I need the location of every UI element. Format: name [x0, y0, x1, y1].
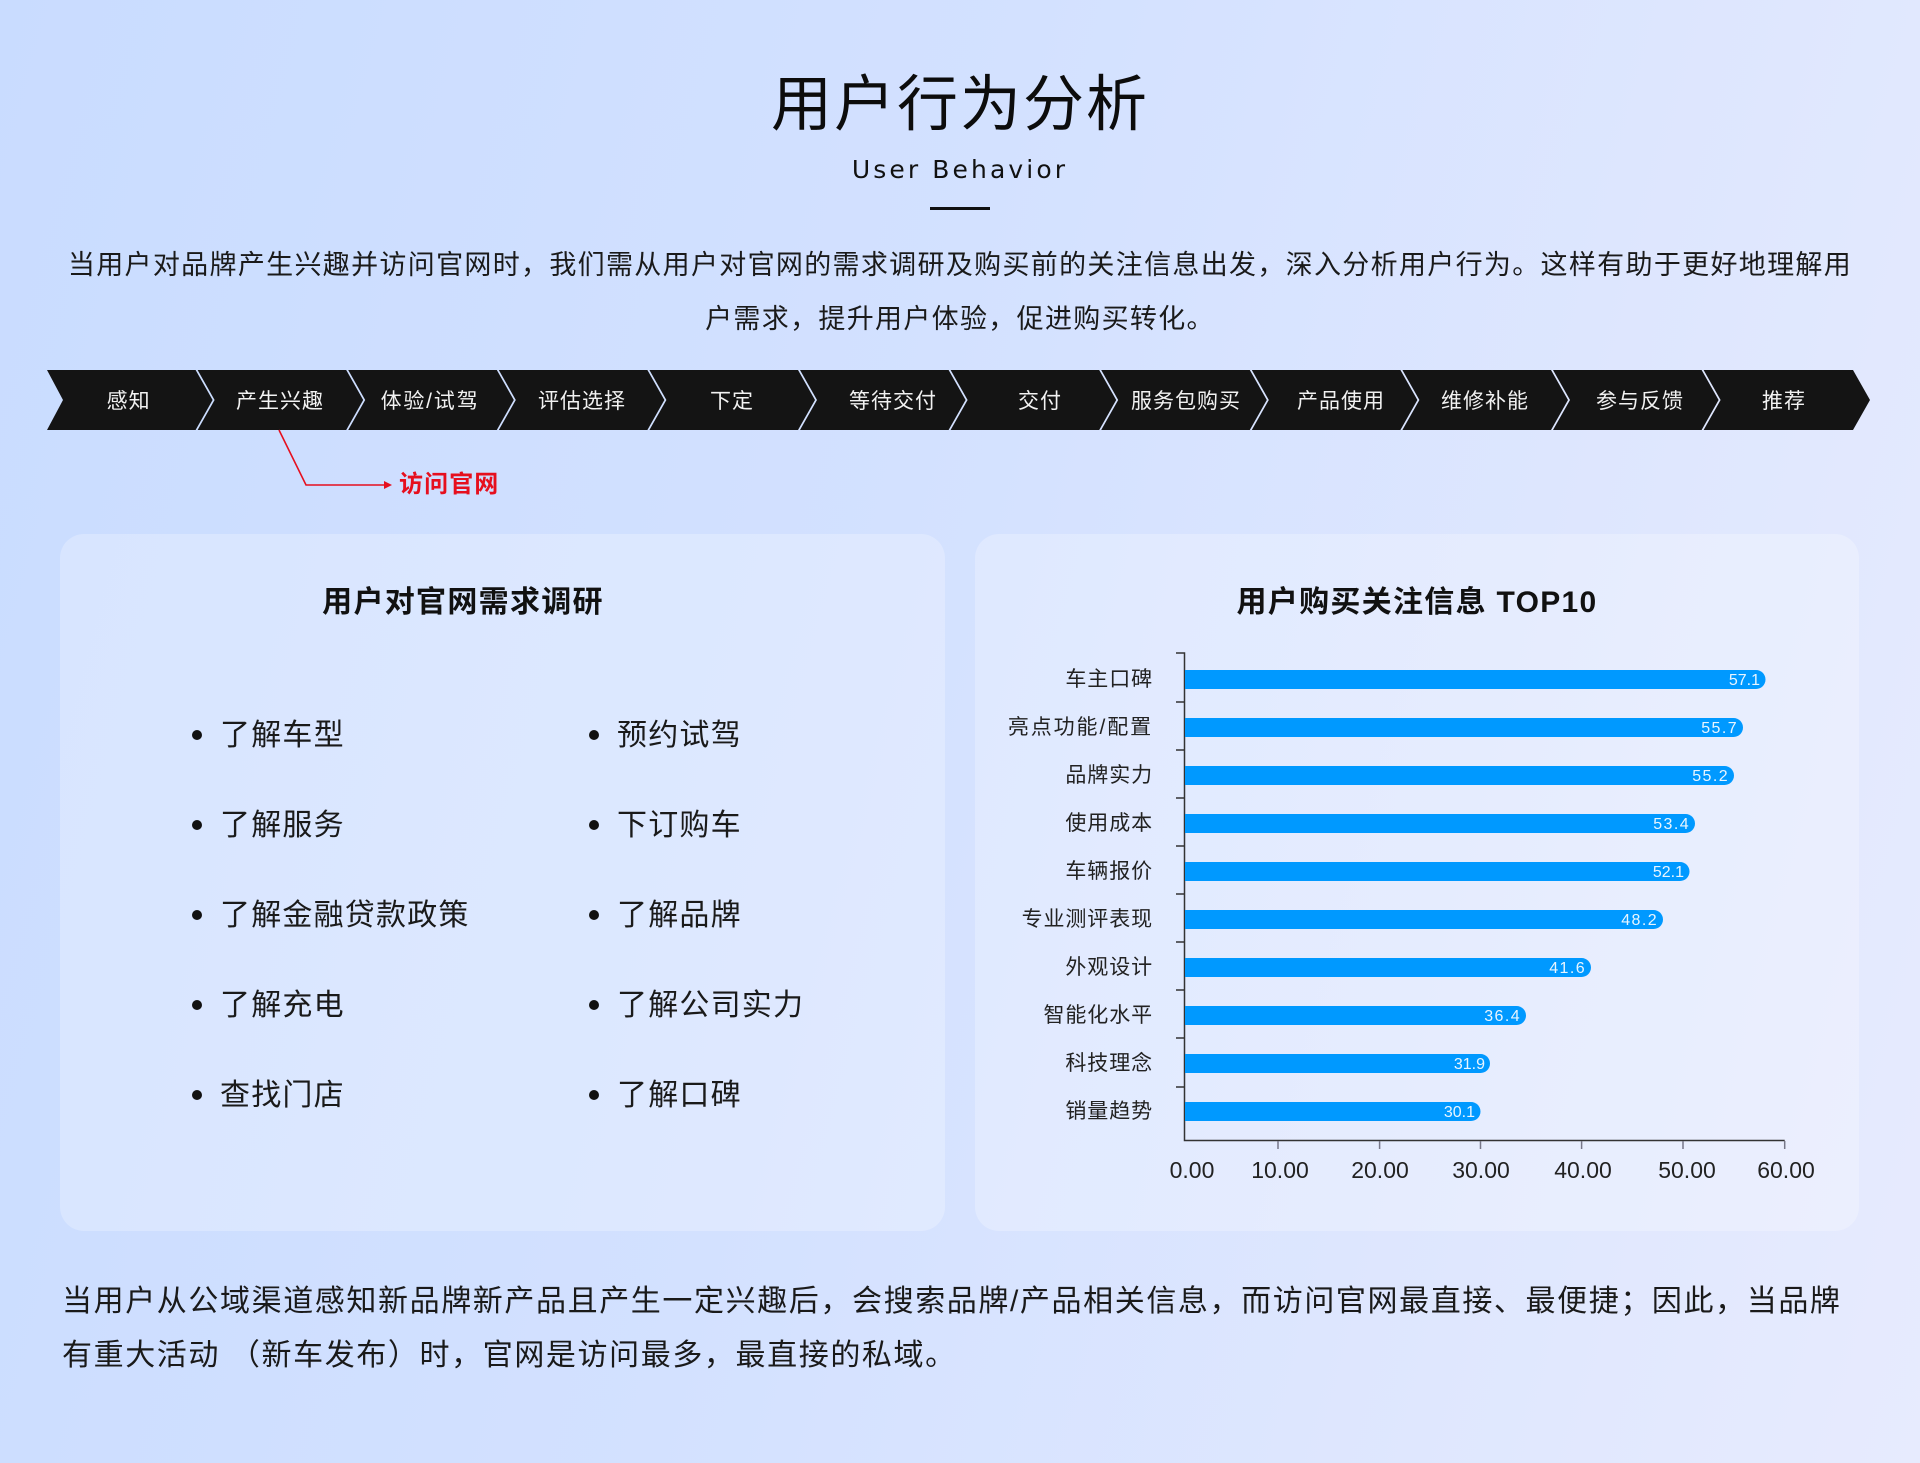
bar: 智能化水平 36.4 [1044, 1004, 1526, 1027]
panel heading: 用户对官网需求调研 [322, 586, 604, 619]
conclusion text: 当用户从公域渠道感知新品牌新产品且产生一定兴趣后，会搜索品牌/产品相关信息，而访问官网最直接、最便捷；因此，当品牌 [62, 1285, 1842, 1318]
x axis labels: 60.00 [1757, 1157, 1815, 1183]
x axis labels: 40.00 [1554, 1157, 1612, 1183]
panel: purchase concerns top 10 [975, 534, 1859, 1231]
callout: 访问官网: 访问官网 [399, 471, 499, 498]
bar: 科技理念 31.9: 31.9 [1454, 1056, 1485, 1073]
conclusion text: 有重大活动 （新车发布）时，官网是访问最多，最直接的私域。 [62, 1339, 957, 1372]
process chevron row [47, 370, 1870, 498]
bar: 车辆报价 52.1: 车辆报价 [1065, 860, 1153, 883]
chevron: 感知 [47, 370, 213, 430]
x axis labels: 0.00 [1170, 1157, 1214, 1183]
list item: 了解公司实力 [617, 989, 804, 1022]
bar: 车主口碑 57.1: 车主口碑 [1065, 668, 1153, 691]
bar: 专业测评表现 48.2 [1022, 908, 1663, 931]
bar: 专业测评表现 48.2: 48.2 [1621, 912, 1658, 929]
bar: 亮点功能/配置 55.7: 55.7 [1701, 720, 1738, 737]
chevron: 交付 [951, 370, 1116, 430]
bar chart [1008, 652, 1815, 1183]
bar: 品牌实力 55.2 [1065, 764, 1734, 787]
intro text [68, 250, 1852, 334]
chevron: 等待交付 [800, 370, 966, 430]
intro text: 户需求，提升用户体验，促进购买转化。 [705, 304, 1215, 334]
bar: 智能化水平 36.4: 36.4 [1484, 1008, 1521, 1025]
title: 用户行为分析 [771, 70, 1149, 138]
x axis labels: 50.00 [1658, 1157, 1716, 1183]
chevron: 等待交付: 等待交付 [849, 390, 937, 413]
chevron: 维修补能 [1402, 370, 1568, 430]
title underline [930, 207, 990, 210]
bar: 专业测评表现 48.2: 专业测评表现 [1022, 908, 1153, 931]
chevron: 产生兴趣: 产生兴趣 [236, 390, 324, 413]
chevron: 产品使用: 产品使用 [1297, 390, 1385, 413]
chevron: 感知: 感知 [107, 390, 151, 413]
chevron: 评估选择: 评估选择 [538, 390, 626, 413]
chevron: 服务包购买 [1101, 370, 1267, 430]
chevron: 参与反馈: 参与反馈 [1596, 390, 1684, 413]
chevron: 交付: 交付 [1018, 390, 1062, 413]
list item: 了解品牌 [617, 899, 742, 932]
x axis labels: 10.00 [1251, 1157, 1309, 1183]
list item: 了解车型 [220, 719, 345, 752]
bar: 销量趋势 30.1 [1065, 1100, 1480, 1123]
x axis labels: 30.00 [1452, 1157, 1510, 1183]
chevron: 参与反馈 [1553, 370, 1719, 430]
bar: 车主口碑 57.1: 57.1 [1729, 672, 1760, 689]
list item: 预约试驾 [617, 719, 742, 752]
chevron: 下定 [649, 370, 815, 430]
bar: 车辆报价 52.1: 52.1 [1653, 864, 1684, 881]
list item: 下订购车 [617, 809, 742, 842]
chevron: 产生兴趣 [198, 370, 363, 430]
bar: 车辆报价 52.1 [1065, 860, 1690, 883]
bar: 外观设计 41.6 [1065, 956, 1591, 979]
list item: 了解充电 [220, 989, 345, 1022]
bar: 品牌实力 55.2: 品牌实力 [1065, 764, 1153, 787]
chevron: 评估选择 [499, 370, 664, 430]
chevron: 维修补能: 维修补能 [1441, 390, 1529, 413]
list item: 了解服务 [220, 809, 345, 842]
chevron: 体验/试驾 [348, 370, 514, 430]
chevron: 产品使用 [1252, 370, 1417, 430]
bar: 品牌实力 55.2: 55.2 [1692, 768, 1729, 785]
chevron: 体验/试驾: 体验/试驾 [381, 390, 479, 413]
bar: 销量趋势 30.1: 30.1 [1444, 1104, 1475, 1121]
conclusion text [62, 1285, 1842, 1372]
panel heading: 用户购买关注信息 TOP10 [1236, 586, 1598, 619]
bar: 销量趋势 30.1: 销量趋势 [1065, 1100, 1153, 1123]
bar: 外观设计 41.6: 外观设计 [1065, 956, 1153, 979]
chevron: 推荐: 推荐 [1762, 390, 1806, 413]
panel: website needs research [60, 534, 945, 1231]
bar: 使用成本 53.4 [1065, 812, 1695, 835]
subtitle: User Behavior [852, 155, 1068, 184]
list item: 了解口碑 [617, 1079, 742, 1112]
bar: 外观设计 41.6: 41.6 [1549, 960, 1586, 977]
chevron: 服务包购买: 服务包购买 [1131, 390, 1241, 413]
bar: 亮点功能/配置 55.7 [1008, 716, 1743, 739]
x axis labels: 20.00 [1351, 1157, 1409, 1183]
x axis labels [1170, 1157, 1815, 1183]
bar: 智能化水平 36.4: 智能化水平 [1044, 1004, 1153, 1027]
bar: 科技理念 31.9: 科技理念 [1065, 1052, 1153, 1075]
list item: 了解金融贷款政策 [220, 899, 470, 932]
list item: 查找门店 [220, 1079, 345, 1112]
chevron: 推荐 [1704, 370, 1870, 430]
bar: 亮点功能/配置 55.7: 亮点功能/配置 [1008, 716, 1153, 739]
bar: 车主口碑 57.1 [1065, 668, 1766, 691]
bar: 使用成本 53.4: 53.4 [1653, 816, 1690, 833]
chevron: 下定: 下定 [710, 390, 754, 413]
arrow: 产生兴趣 to 访问官网 [279, 430, 392, 489]
intro text: 当用户对品牌产生兴趣并访问官网时，我们需从用户对官网的需求调研及购买前的关注信息出发，深入分析用户行为。这样有助于更好地理解用 [68, 250, 1852, 280]
bar: 使用成本 53.4: 使用成本 [1065, 812, 1153, 835]
bar: 科技理念 31.9 [1065, 1052, 1490, 1075]
